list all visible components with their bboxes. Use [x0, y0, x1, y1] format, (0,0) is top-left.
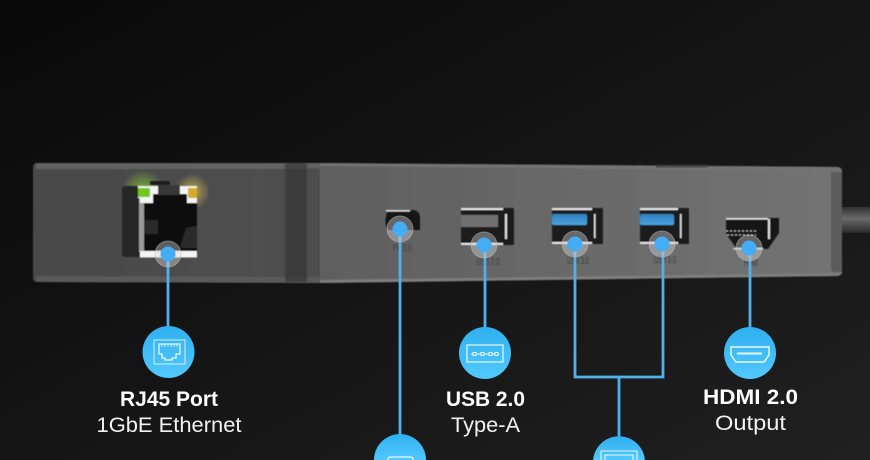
label: USB 2.0: Type-A: [451, 414, 520, 437]
label: USB 2.0: [446, 388, 525, 437]
label: HDMI 2.0: Output: [715, 412, 786, 435]
label: RJ45: [96, 388, 242, 437]
label: HDMI 2.0: HDMI 2.0: [703, 386, 798, 409]
icon: HDMI: [724, 327, 776, 379]
icon: USB 2.0: [459, 327, 511, 379]
PD port: [386, 210, 420, 254]
port markers: [155, 216, 762, 267]
icon: RJ45: [142, 326, 194, 378]
connector lines: [168, 229, 750, 440]
label: HDMI 2.0: [703, 386, 798, 435]
USB 3.0 port right: [640, 208, 689, 266]
label: RJ45: 1GbE Ethernet: [96, 414, 242, 437]
dock body: [33, 163, 842, 283]
icon: USB-C: [374, 434, 426, 460]
label: RJ45: RJ45 Port: [120, 388, 218, 411]
USB 2.0 port: [461, 208, 514, 268]
PD port: PD 3.0: [392, 243, 412, 254]
icon: USB 3.0: [593, 436, 645, 460]
USB 3.0 port left: [552, 208, 603, 267]
cable: [840, 207, 870, 233]
USB 3.0 port right: USB 3.0: [654, 255, 676, 266]
RJ45 port: [121, 170, 210, 258]
HDMI port: HDMI: [744, 258, 758, 269]
USB 2.0 port: USB 2.0: [476, 257, 500, 268]
label: USB 2.0: USB 2.0: [446, 388, 525, 411]
HDMI port: [726, 218, 779, 269]
USB 3.0 port left: USB 3.0: [567, 256, 589, 267]
